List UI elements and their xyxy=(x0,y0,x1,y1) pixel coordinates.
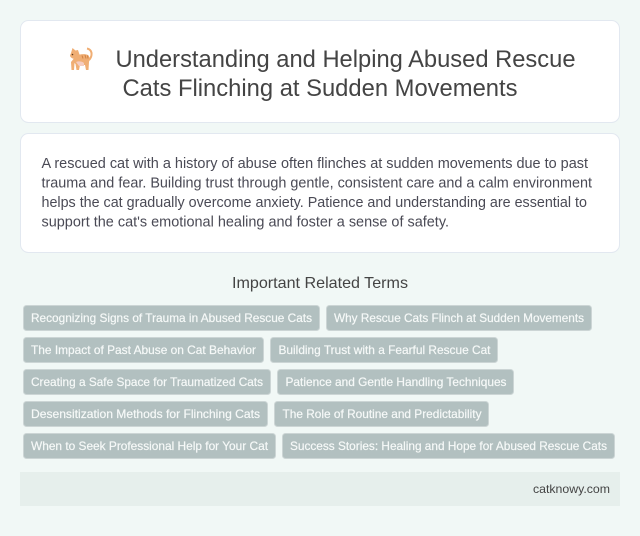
tag: Desensitization Methods for Flinching Cats xyxy=(31,407,260,421)
tag: Success Stories: Healing and Hope for Abused Rescue Cats xyxy=(290,439,607,453)
tag xyxy=(24,338,264,362)
heading: related terms: Important Related Terms xyxy=(232,275,408,292)
tag: The Impact of Past Abuse on Cat Behavior xyxy=(31,343,256,357)
title text: Cats Flinching at Sudden Movements xyxy=(122,75,518,102)
tag xyxy=(24,402,268,426)
description text: helps the cat gradually overcome anxiety. Patience and understanding are essential to xyxy=(42,195,587,211)
tag xyxy=(24,370,270,394)
tag xyxy=(282,434,614,458)
tag: When to Seek Professional Help for Your Cat xyxy=(31,439,269,453)
description text: support the cat's emotional healing and foster a sense of safety. xyxy=(42,214,449,230)
tag list xyxy=(24,306,614,458)
description text: trauma and fear. Building trust through gentle, consistent care and a calm environment xyxy=(42,176,592,192)
tag xyxy=(274,402,488,426)
tag: Recognizing Signs of Trauma in Abused Rescue Cats xyxy=(31,311,312,325)
tag: Why Rescue Cats Flinch at Sudden Movements xyxy=(334,311,584,325)
panel: description xyxy=(20,134,620,252)
icon: cat xyxy=(70,48,92,70)
tag xyxy=(24,306,320,330)
tag: Creating a Safe Space for Traumatized Cats xyxy=(31,375,263,389)
title text xyxy=(116,46,576,102)
panel: title card xyxy=(20,20,620,122)
footer text: catknowy.com xyxy=(533,482,610,496)
tag xyxy=(270,338,498,362)
tag: Patience and Gentle Handling Techniques xyxy=(286,375,506,389)
tag xyxy=(278,370,514,394)
footer xyxy=(20,472,620,506)
description text xyxy=(42,156,592,230)
description text: A rescued cat with a history of abuse often flinches at sudden movements due to past xyxy=(42,156,588,172)
tag xyxy=(326,306,592,330)
title text: Understanding and Helping Abused Rescue xyxy=(116,46,576,73)
tag: The Role of Routine and Predictability xyxy=(282,407,482,421)
tag xyxy=(24,434,276,458)
tag: Building Trust with a Fearful Rescue Cat xyxy=(278,343,491,357)
